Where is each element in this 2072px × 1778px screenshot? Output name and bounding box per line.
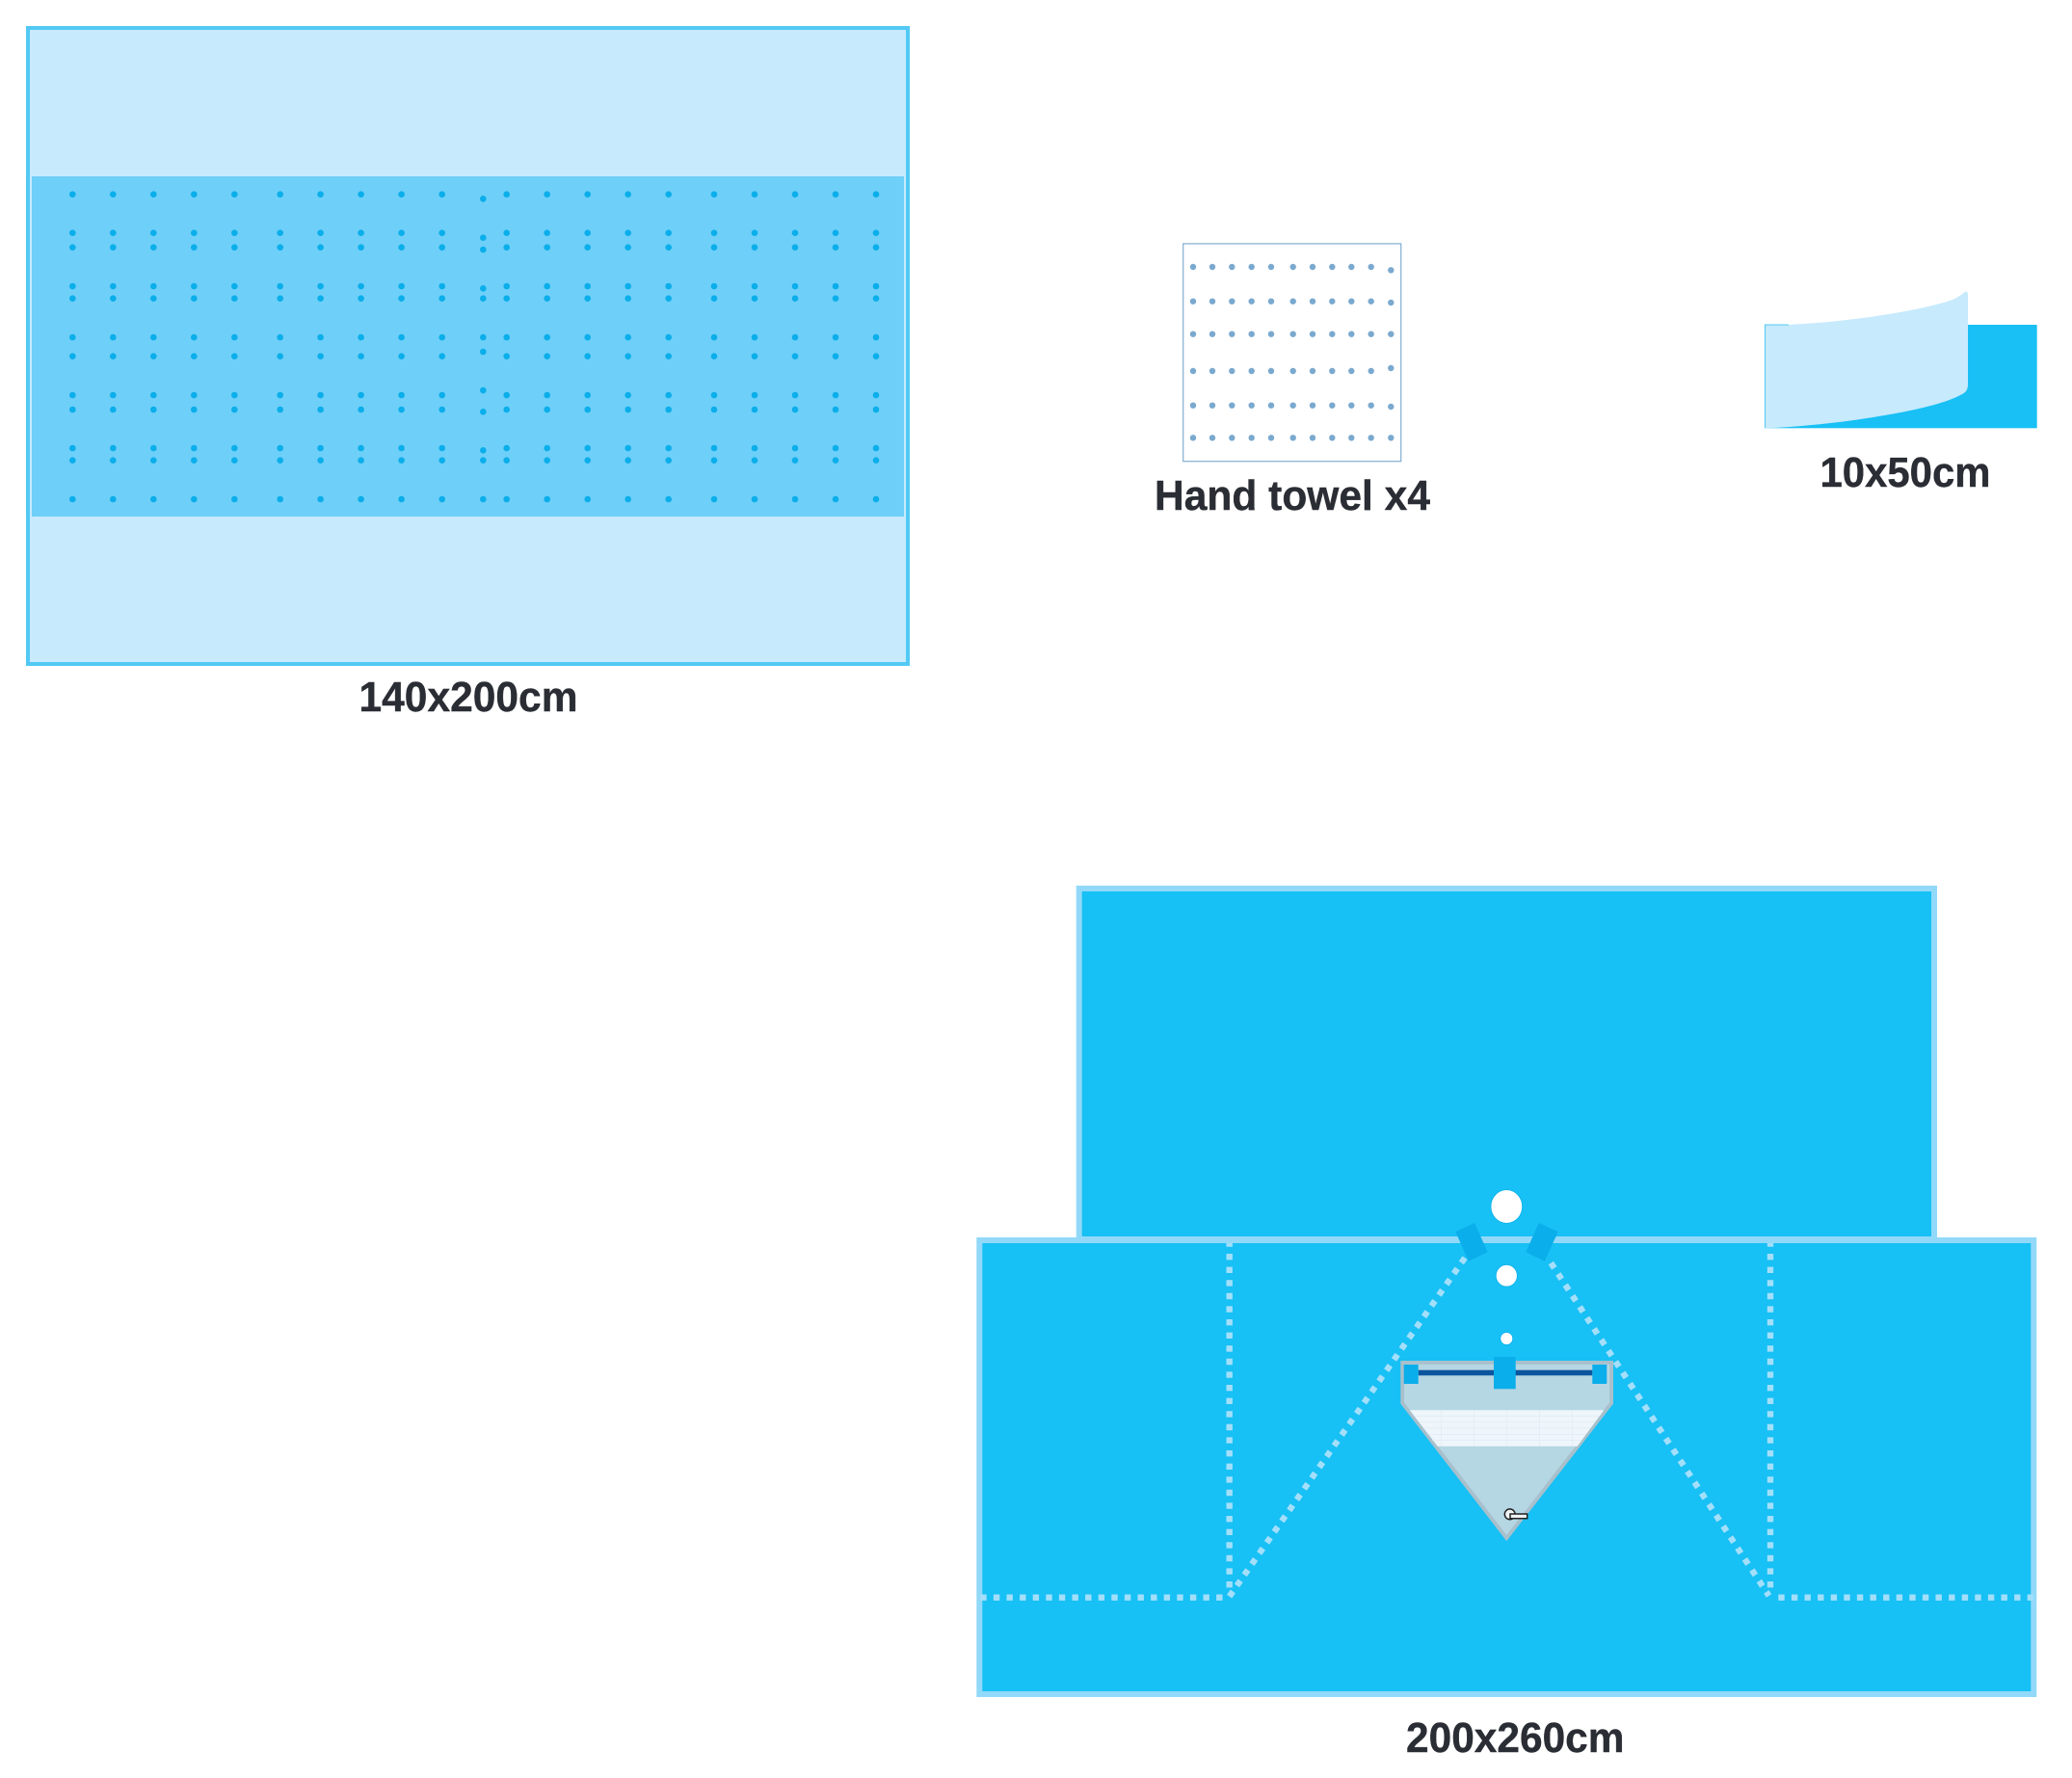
lower sheet — [979, 1240, 2033, 1694]
panel: 10x50cm adhesive tape — [1765, 292, 2037, 428]
perforation dots — [69, 191, 879, 502]
tape base — [1765, 325, 2037, 428]
label: 140x200cm: 140x200cm — [359, 674, 578, 721]
panel: hand towel — [1183, 244, 1401, 462]
graduated scale band — [1410, 1410, 1604, 1446]
right connector tab — [1526, 1223, 1558, 1261]
towel dots — [1190, 264, 1395, 440]
liner left edge — [1766, 325, 1789, 428]
small hole — [1501, 1332, 1513, 1345]
panel: 140x200cm drape — [28, 28, 908, 664]
label: 10x50cm: 10x50cm — [1820, 449, 1991, 496]
panel: 200x260cm drape — [979, 889, 2033, 1694]
drain valve — [1504, 1509, 1527, 1520]
left connector tab — [1455, 1223, 1488, 1261]
drape sheet — [28, 28, 908, 664]
centre bar clip — [1494, 1357, 1516, 1389]
fluid collection pouch — [1402, 1357, 1611, 1538]
right bar clip — [1592, 1365, 1607, 1384]
pouch body — [1402, 1363, 1611, 1538]
peeled release liner — [1765, 292, 1968, 428]
upper sheet — [1079, 889, 1934, 1239]
wire bar — [1419, 1370, 1592, 1375]
label: hand towel x4: Hand towel x4 — [1155, 472, 1431, 519]
large hole — [1491, 1190, 1523, 1223]
towel outline — [1183, 244, 1401, 462]
label: 200x260cm: 200x260cm — [1406, 1714, 1625, 1762]
left bar clip — [1404, 1365, 1419, 1384]
absorbent centre strip — [32, 176, 904, 517]
dotted fold lines — [980, 1243, 2033, 1598]
medium hole — [1496, 1264, 1517, 1287]
